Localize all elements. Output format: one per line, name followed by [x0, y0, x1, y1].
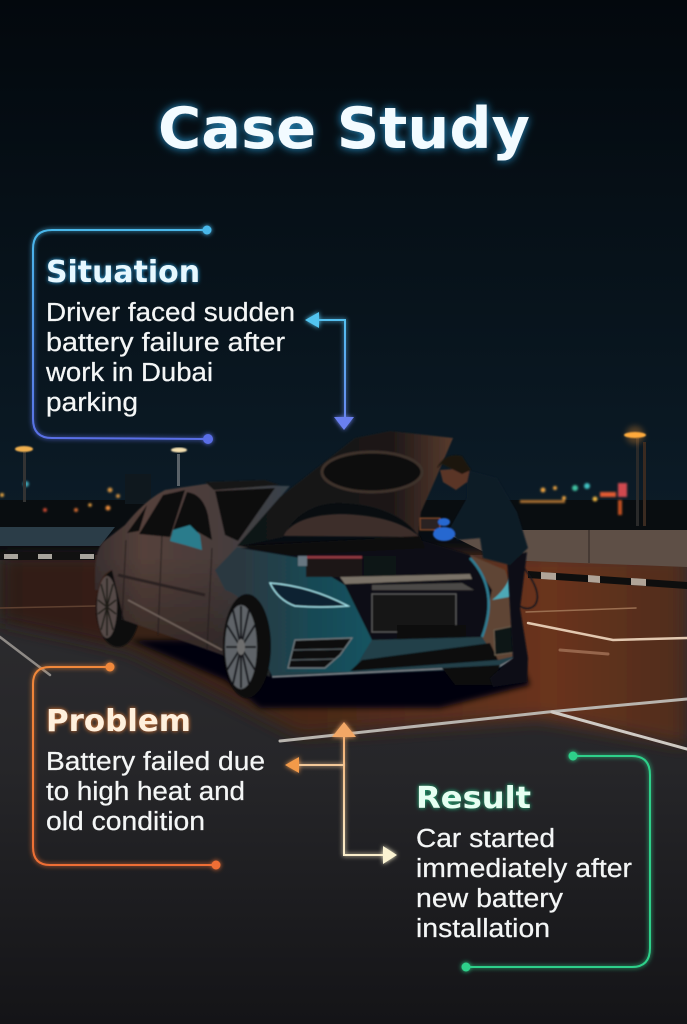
night sky background: [0, 0, 687, 530]
body text: battery failure after: [46, 329, 286, 357]
front bumper: [272, 637, 519, 678]
body text: [416, 825, 633, 943]
body text: [45, 299, 295, 417]
car side body: [95, 484, 300, 677]
cross bars: [340, 574, 472, 584]
cowl: [240, 536, 425, 555]
distant city skyline and lights: [0, 474, 687, 532]
street lamps: [15, 426, 646, 526]
legs: [490, 552, 528, 687]
torso: [450, 470, 528, 565]
open hood: [237, 431, 453, 546]
front teal fender and nose: [215, 547, 372, 677]
car with open hood: [95, 431, 519, 698]
plate: [397, 625, 466, 648]
arrow: situation to car: [305, 312, 354, 430]
cable: [513, 555, 537, 608]
panel: result: [416, 752, 650, 972]
windshield: [215, 488, 275, 541]
engine bay: [240, 540, 492, 640]
side windows: [127, 490, 212, 540]
front wheel: [223, 594, 271, 698]
car shadow: [130, 640, 530, 708]
panel: situation: [33, 226, 295, 444]
body text: [46, 748, 265, 836]
body text: parking: [46, 389, 138, 417]
front right tire: [442, 665, 500, 685]
heading: Situation: [46, 255, 200, 290]
body text: Car started: [416, 825, 555, 853]
body text: to high heat and: [46, 778, 245, 806]
roof: [205, 480, 280, 490]
fender inner glow: [470, 558, 489, 637]
bracket: [462, 752, 650, 972]
bumper lip: [272, 656, 519, 677]
heading: Problem: [46, 704, 191, 739]
radiator: [372, 594, 456, 632]
interior through windshield: [283, 514, 420, 537]
headlights: [270, 583, 348, 607]
rear wheel: [96, 569, 140, 647]
body text: Driver faced sudden: [46, 299, 295, 327]
air intake: [288, 638, 352, 668]
gloves: [433, 518, 455, 541]
mechanic: [420, 455, 537, 687]
heading: Result: [416, 781, 531, 816]
batteries: [298, 556, 396, 577]
body text: old condition: [46, 808, 205, 836]
body text: new battery: [416, 885, 563, 913]
parking lot ground: [0, 555, 687, 1024]
bracket: [33, 226, 213, 444]
hair: [437, 455, 471, 474]
barrier walls and curbs: [0, 527, 687, 589]
arrows: problem and result: [285, 722, 397, 864]
side body shading: [95, 525, 280, 677]
body text: Battery failed due: [46, 748, 265, 776]
body text: immediately after: [416, 855, 633, 883]
right copper fender: [470, 555, 519, 660]
panel: problem: [33, 662, 265, 870]
tablet: [420, 518, 440, 530]
body text: work in Dubai: [45, 359, 213, 387]
hood inner panel: [322, 452, 422, 492]
bracket: [33, 662, 220, 870]
parking bay lines: [0, 606, 687, 749]
wing mirror: [170, 525, 202, 550]
door shut lines and side crease: [118, 535, 222, 650]
title: Case Study: [158, 96, 530, 162]
lower grille: [350, 643, 498, 671]
head: [440, 468, 470, 490]
body text: installation: [416, 915, 550, 943]
